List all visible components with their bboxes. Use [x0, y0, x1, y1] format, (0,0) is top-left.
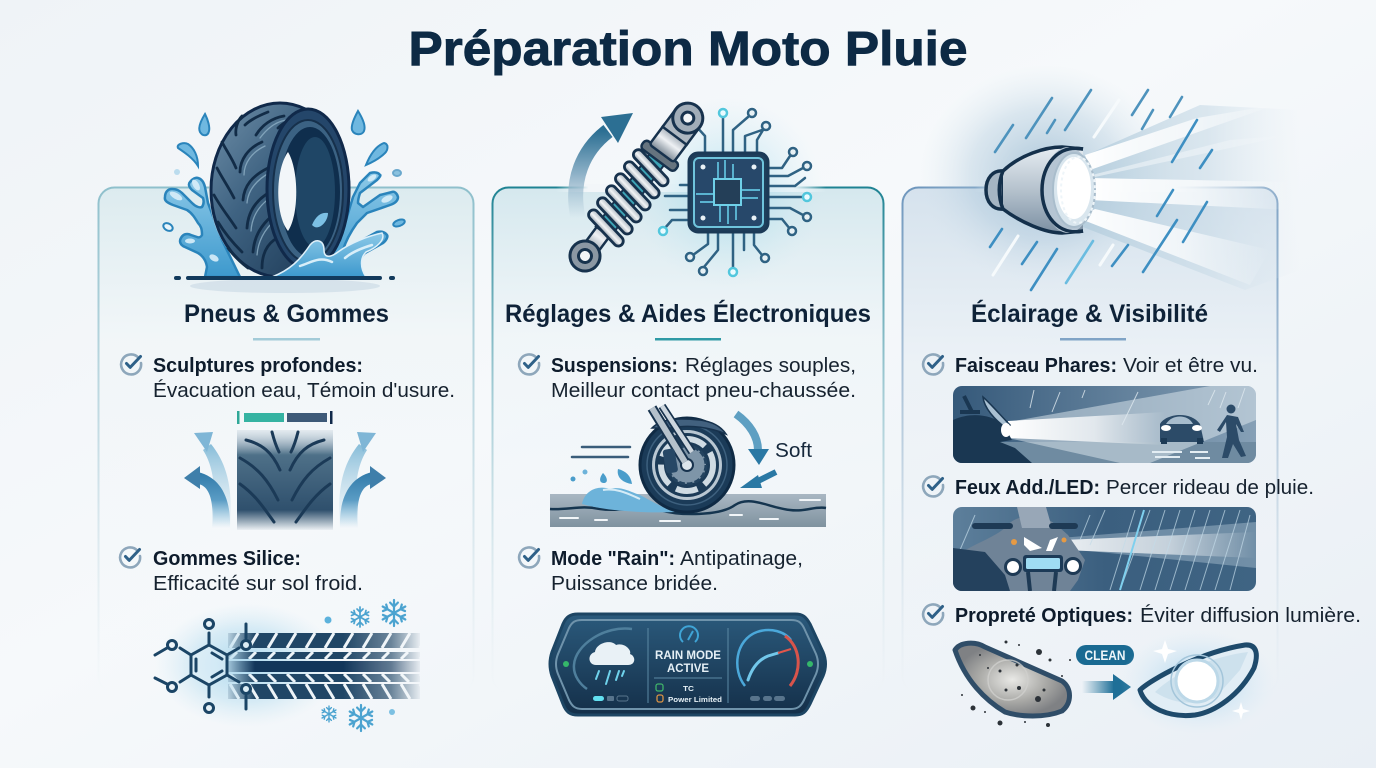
item: proprete optiques: [923, 604, 1361, 627]
item: faisceau phares: Voir et être vu.: [1123, 355, 1258, 377]
illustration: silica molecule and tire track: [155, 600, 420, 731]
arrows: left water flow: [184, 432, 231, 528]
dashboard text: [655, 650, 722, 704]
rain cloud: [589, 642, 634, 701]
item: faisceau phares: Faisceau Phares:: [955, 355, 1117, 377]
arrow: soft compression: [736, 414, 776, 488]
heading: Pneus & Gommes: [184, 300, 389, 328]
panel frame: [492, 188, 884, 692]
item: suspensions: Meilleur contact pneu-chaussée.: [551, 380, 856, 402]
dashboard text: TC: [683, 684, 695, 693]
illustration: auxiliary lights in rain: [953, 507, 1256, 591]
item: proprete optiques: Éviter diffusion lumière.: [1140, 604, 1361, 627]
label: clean pill: CLEAN: [1084, 648, 1126, 663]
panel: reglages et aides electroniques: [492, 92, 884, 715]
dirty lens: [955, 640, 1071, 727]
panel: eclairage et visibilite: [902, 65, 1361, 734]
panel frame: [98, 188, 474, 692]
silica molecule: [155, 620, 250, 712]
item: sculptures profondes: Évacuation eau, Témoin d'usure.: [153, 379, 455, 402]
heading: Éclairage & Visibilité: [971, 299, 1208, 328]
item: feux additionnels: Feux Add./LED:: [955, 477, 1100, 499]
arrow: upward curve: [576, 113, 633, 218]
item: gommes silice: Efficacité sur sol froid.: [153, 573, 363, 595]
item: suspensions: [519, 354, 856, 402]
item: gommes silice: [120, 547, 363, 595]
item: gommes silice: Gommes Silice:: [153, 548, 301, 570]
chip: [689, 153, 768, 232]
item: sculptures profondes: Sculptures profondes:: [153, 355, 363, 377]
tire track: [228, 633, 420, 699]
item: mode rain: Mode "Rain":: [551, 548, 675, 570]
item: mode rain: Antipatinage,: [680, 548, 803, 570]
item: suspensions: Suspensions:: [551, 355, 678, 377]
illustration: tread water evacuation: [184, 411, 386, 530]
illustration: beam scene with car and pedestrian: [953, 386, 1256, 463]
lamp housing: [986, 147, 1095, 233]
speedometer gauge: [737, 630, 798, 701]
panel: pneus et gommes: [98, 103, 474, 731]
shock absorber: [557, 92, 716, 282]
item: mode rain: Puissance bridée.: [551, 573, 718, 595]
item: sculptures profondes: [121, 354, 455, 402]
item: suspensions: Réglages souples,: [685, 355, 856, 377]
icon: headlight with rain: [920, 65, 1300, 290]
circuit traces: [665, 117, 805, 267]
icon: shock absorber and chip: [557, 92, 823, 287]
heading: Réglages & Aides Électroniques: [505, 299, 871, 328]
item: feux additionnels: Percer rideau de pluie.: [1106, 477, 1314, 499]
illustration: dirty to clean lens: [955, 630, 1276, 734]
arrow: to clean: [1082, 674, 1131, 700]
dashboard text: ACTIVE: [667, 663, 709, 675]
icon: tire with water splash: [162, 103, 406, 293]
dashboard text: RAIN MODE: [655, 650, 721, 662]
snowflakes: [322, 600, 405, 731]
dashboard text: Power Limited: [668, 695, 722, 704]
illustration: rain mode dashboard: [550, 614, 826, 715]
speedometer small icon: [680, 626, 698, 642]
illustration: wheel on wet road: [550, 406, 826, 527]
item: proprete optiques: Propreté Optiques:: [955, 605, 1133, 627]
clean lens: [1120, 630, 1276, 734]
foreground splash: [272, 233, 383, 277]
arrows: right water flow: [339, 432, 386, 528]
road: [550, 494, 826, 527]
wheel: [640, 406, 734, 512]
item: mode rain: [519, 547, 803, 595]
label: soft: Soft: [775, 440, 812, 462]
panel frame: [902, 188, 1278, 692]
water drops: [162, 111, 406, 233]
tire body: [209, 103, 349, 277]
water spray: [582, 488, 675, 512]
item: feux additionnels: [923, 476, 1314, 499]
ground line: [174, 276, 395, 280]
item: faisceau phares: [923, 354, 1258, 377]
title: Préparation Moto Pluie: [408, 23, 968, 76]
label: clean pill: [1076, 645, 1134, 665]
